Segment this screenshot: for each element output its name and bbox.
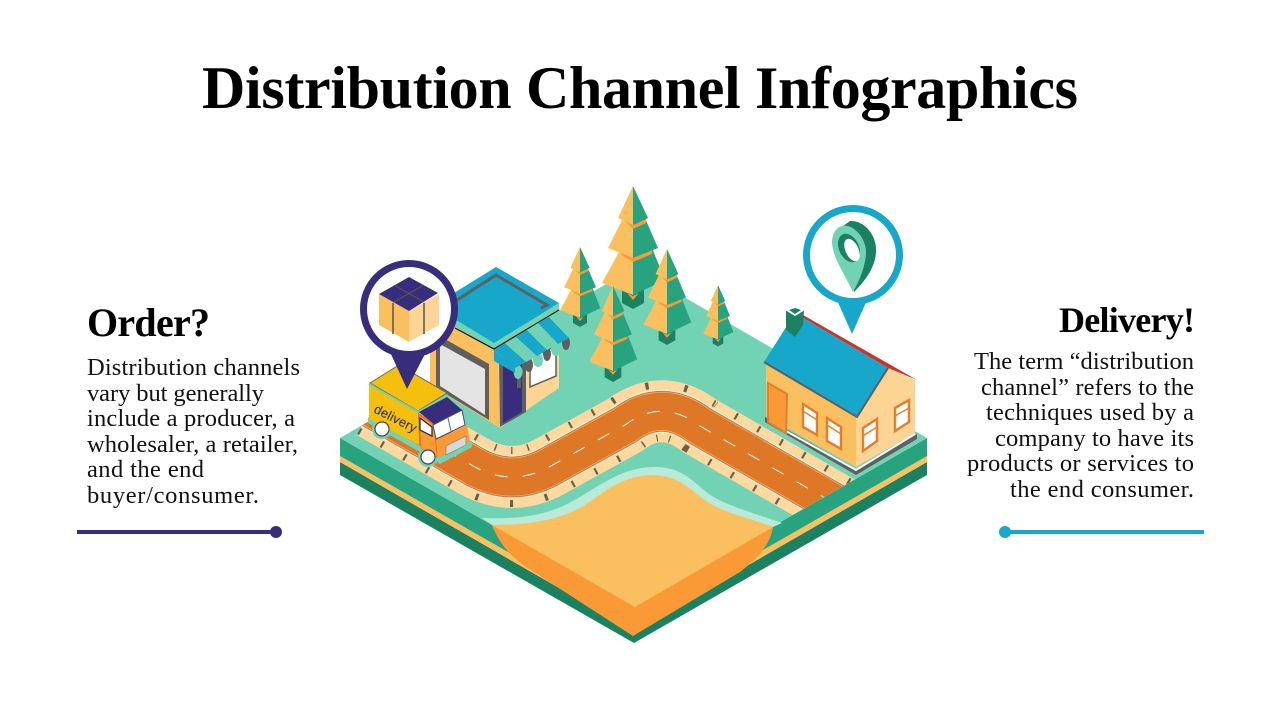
- pin: location: [806, 208, 900, 334]
- roof: [764, 313, 917, 417]
- text block: order description: include a producer, a: [87, 405, 295, 432]
- road with sidewalk: [372, 408, 870, 524]
- text block: order description: vary but generally: [87, 380, 265, 407]
- shop door: [499, 350, 526, 427]
- truck skirt and fenders: [368, 417, 472, 467]
- text block: delivery description: techniques used by a: [986, 399, 1194, 426]
- house: [764, 305, 917, 475]
- heading: Order?: Order?: [87, 300, 210, 345]
- divider line with dot: order: [77, 526, 282, 538]
- text block: delivery description: products or services to: [967, 450, 1194, 477]
- chimney: [785, 305, 805, 337]
- door: [768, 383, 787, 433]
- awning: [494, 310, 580, 388]
- text block: delivery description: channel” refers to the: [981, 374, 1194, 401]
- text block: delivery description: The term “distribution: [974, 348, 1194, 375]
- text block: order description: buyer/consumer.: [87, 482, 259, 509]
- side window: [530, 346, 556, 387]
- text block: order description: and the end: [87, 456, 204, 483]
- pin: package: [364, 264, 454, 389]
- sand beach: [482, 467, 782, 636]
- text block: delivery description: the end consumer.: [1010, 476, 1194, 503]
- panel: order text: [77, 300, 300, 538]
- isometric map illustration: [340, 186, 927, 643]
- truck label: delivery: [372, 401, 420, 436]
- truck wheels: [375, 422, 435, 464]
- text block: order description: wholesaler, a retailer,: [87, 431, 298, 458]
- shop building: [430, 267, 580, 428]
- panel: delivery text: [967, 300, 1204, 538]
- text block: delivery description: company to have its: [995, 425, 1194, 452]
- base platform: [340, 268, 927, 643]
- text block: delivery description: [967, 348, 1194, 503]
- icon: location marker: [832, 221, 876, 292]
- windows: [803, 400, 909, 451]
- shop window: [436, 334, 489, 420]
- heading: Delivery!: Delivery!: [1059, 300, 1195, 340]
- divider line with dot: delivery: [999, 526, 1204, 538]
- truck cab: [419, 397, 470, 458]
- icon: package box: [379, 277, 439, 342]
- text block: order description: Distribution channels: [87, 354, 300, 381]
- roof: [433, 267, 559, 349]
- delivery truck: [368, 365, 472, 467]
- text block: order description: [87, 354, 300, 509]
- title: Distribution Channel Infographics: [202, 55, 1078, 121]
- trees: [560, 186, 733, 382]
